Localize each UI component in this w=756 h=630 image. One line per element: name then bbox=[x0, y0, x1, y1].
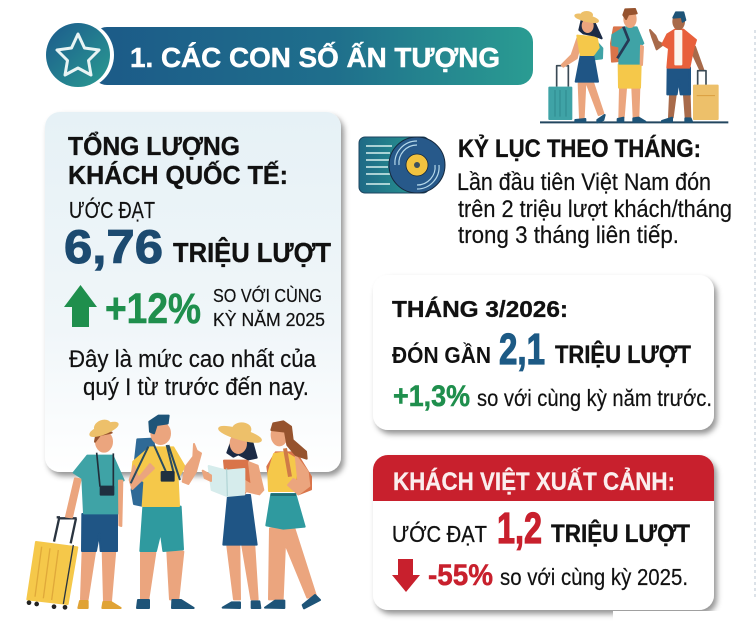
header bar bbox=[373, 455, 714, 501]
estimate label: ƯỚC ĐẠT bbox=[69, 197, 155, 223]
summary text bbox=[69, 346, 317, 401]
summary text: quý I từ trước đến nay. bbox=[83, 374, 309, 401]
text block: monthly record: KỶ LỤC THEO THÁNG: bbox=[458, 133, 701, 163]
line: 1.2 million: TRIỆU LƯỢT bbox=[551, 518, 690, 548]
header banner bbox=[46, 21, 533, 89]
growth figure +1,3%: +1,3% bbox=[393, 380, 470, 413]
icon: red down arrow bbox=[392, 559, 420, 592]
text block: monthly record: Lần đầu tiên Việt Nam đón bbox=[457, 169, 711, 196]
text block: monthly record bbox=[457, 133, 732, 249]
line: 1.2 million: 1,2 bbox=[497, 504, 542, 553]
text block: monthly record: trong 3 tháng liên tiếp. bbox=[458, 222, 679, 249]
comparison note: SO VỚI CÙNG bbox=[213, 285, 322, 306]
panel: March 2026 bbox=[373, 275, 714, 430]
decline figure -55%: -55% bbox=[428, 559, 493, 592]
panel: Vietnamese outbound travellers bbox=[373, 455, 714, 610]
heading: outbound: KHÁCH VIỆT XUẤT CẢNH: bbox=[393, 466, 675, 496]
illustration: four tourists with map and suitcase bbox=[27, 416, 320, 610]
growth figure +12%: +12% bbox=[105, 285, 201, 333]
line: nearly 2.1 million bbox=[392, 325, 691, 374]
panel: total international visitors bbox=[45, 112, 341, 472]
comparison note: KỲ NĂM 2025 bbox=[213, 310, 325, 330]
heading: March 2026: THÁNG 3/2026: bbox=[392, 295, 568, 322]
icon: star badge bbox=[46, 21, 114, 89]
icon: vinyl record with speed lines bbox=[359, 137, 445, 193]
comparison note bbox=[213, 285, 325, 330]
line: nearly 2.1 million: TRIỆU LƯỢT bbox=[555, 339, 691, 369]
icon: green up arrow bbox=[64, 285, 97, 327]
comparison note: so với cùng kỳ 2025. bbox=[500, 564, 688, 590]
line: nearly 2.1 million: ĐÓN GẦN bbox=[392, 341, 491, 368]
title: 1. CÁC CON SỐ ẤN TƯỢNG bbox=[130, 41, 500, 73]
heading: total international visitors: KHÁCH QUỐC TẾ: bbox=[68, 160, 288, 190]
line: 1.2 million: ƯỚC ĐẠT bbox=[392, 521, 487, 547]
comparison note: so với cùng kỳ năm trước. bbox=[477, 385, 712, 411]
summary text: Đây là mức cao nhất của bbox=[69, 346, 317, 373]
heading: total international visitors bbox=[68, 131, 288, 190]
unit label: TRIỆU LƯỢT bbox=[173, 237, 331, 268]
line: 1.2 million bbox=[392, 504, 690, 553]
illustration: three travellers with suitcases bbox=[540, 9, 728, 122]
line: nearly 2.1 million: 2,1 bbox=[499, 325, 545, 374]
heading: total international visitors: TỔNG LƯỢNG bbox=[68, 131, 240, 161]
key number 6,76: 6,76 bbox=[64, 220, 163, 273]
